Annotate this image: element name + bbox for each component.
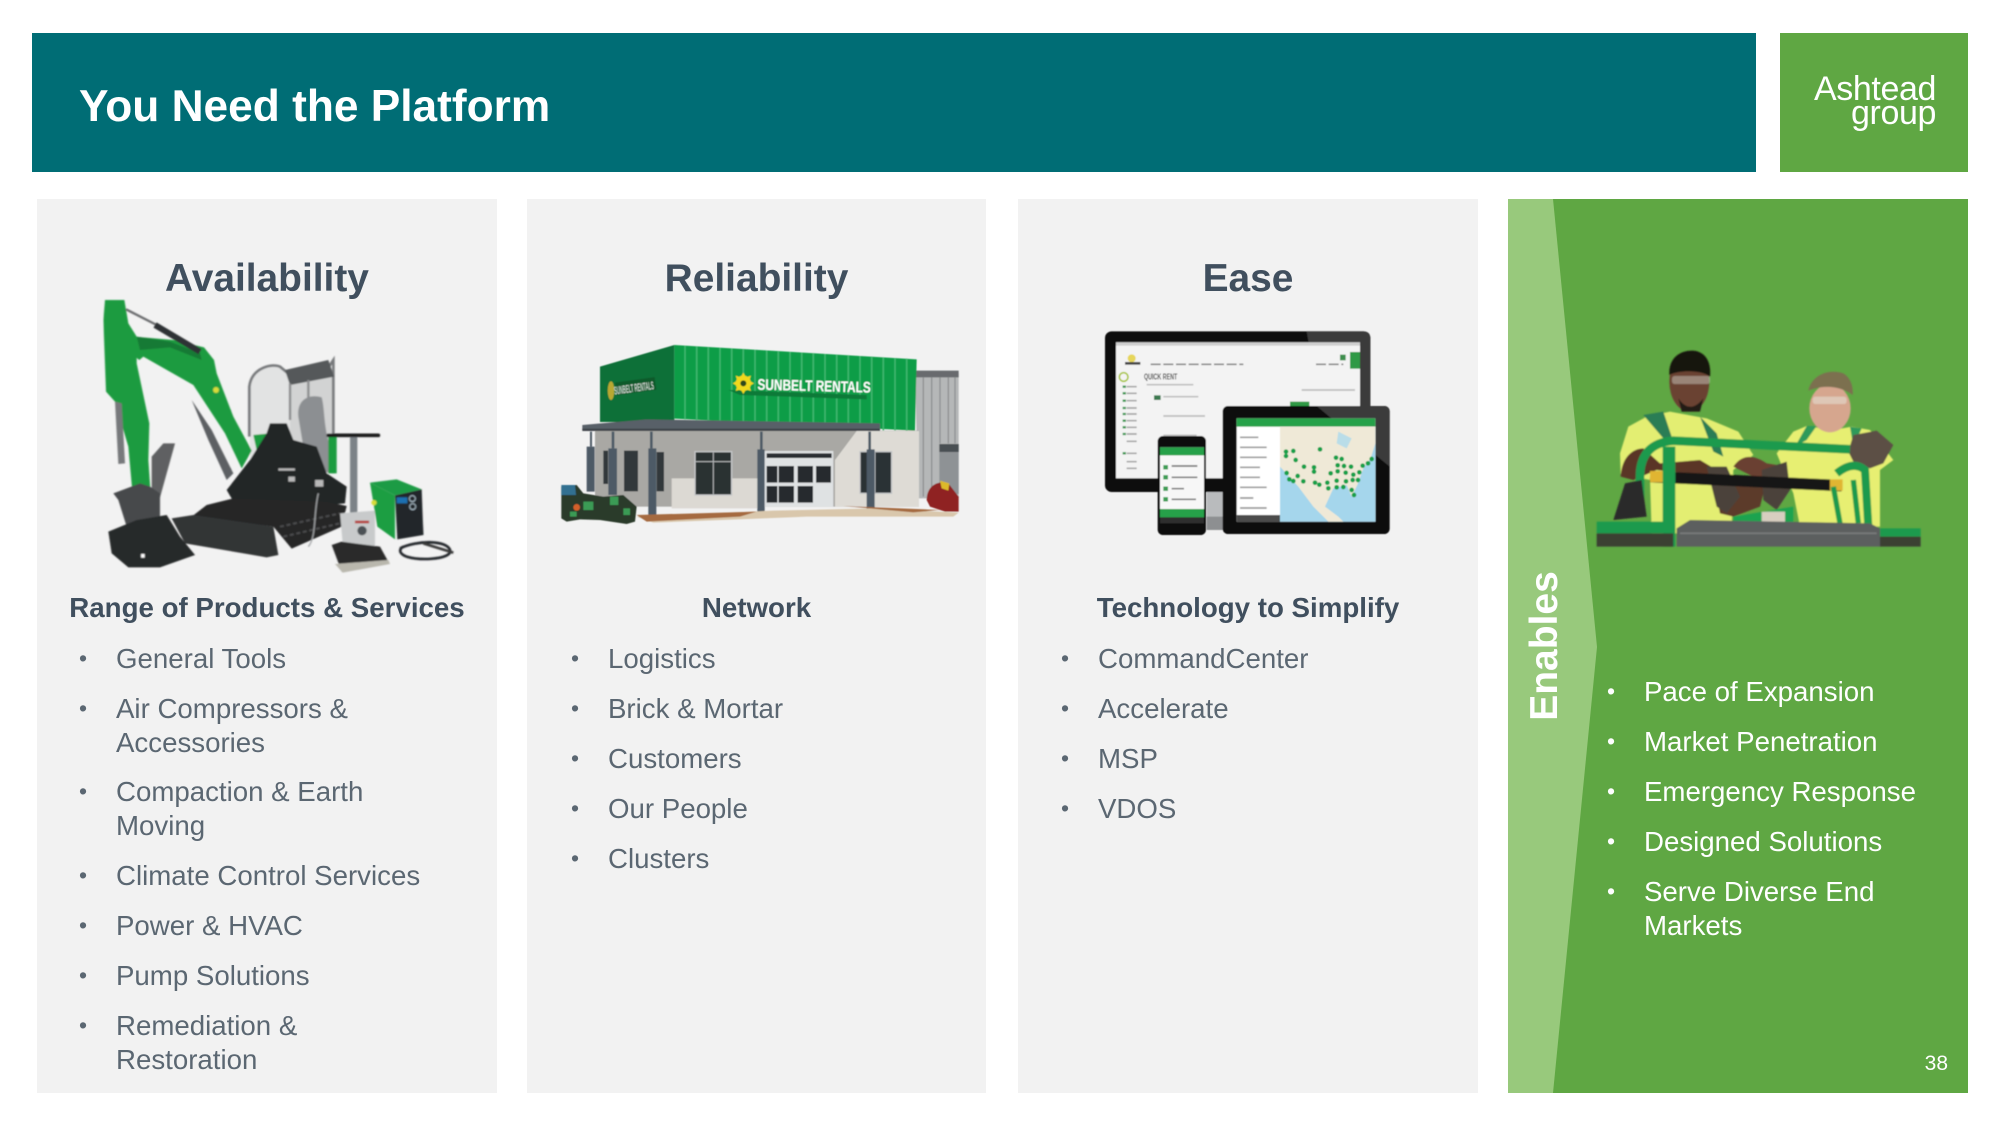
list item — [1061, 793, 1176, 824]
list item: Restoration — [116, 1044, 257, 1074]
list item: Compaction & Earth — [116, 776, 363, 807]
list item: • — [79, 1012, 87, 1038]
list item: Brick & Mortar — [608, 693, 783, 724]
header bar with title — [32, 33, 1756, 172]
list item — [1607, 876, 1874, 940]
list item — [79, 693, 348, 758]
list item: Accelerate — [1098, 693, 1229, 724]
list item: • — [1607, 728, 1615, 754]
page number: 38 — [1925, 1052, 1948, 1075]
list item: Pace of Expansion — [1644, 676, 1874, 707]
list item: Clusters — [608, 843, 709, 874]
logo wordmark — [1814, 70, 1936, 132]
list item: Customers — [608, 743, 742, 774]
heading: Availability: Availability — [165, 257, 369, 300]
list item: • — [571, 645, 579, 671]
list item: • — [1607, 778, 1615, 804]
list item: • — [1061, 745, 1069, 771]
list item: Market Penetration — [1644, 726, 1878, 757]
list item: Markets — [1644, 910, 1742, 940]
list item: Emergency Response — [1644, 776, 1916, 807]
illustration: monitor, tablet and phone screens — [1104, 330, 1391, 536]
list item: • — [79, 862, 87, 888]
illustration: excavator, compactor and welder — [102, 298, 454, 574]
logo wordmark: Ashtead — [1814, 70, 1936, 108]
list item: • — [1607, 828, 1615, 854]
list item: • — [1607, 678, 1615, 704]
list item: Power & HVAC — [116, 910, 303, 941]
illustration: Sunbelt Rentals branch building: SUNBELT RENTALS — [613, 380, 655, 398]
heading: Ease: Ease — [1203, 257, 1293, 300]
list item: Air Compressors & — [116, 693, 348, 724]
list item: • — [1061, 645, 1069, 671]
list item: • — [79, 962, 87, 988]
list item: MSP — [1098, 743, 1158, 774]
chevron band — [1508, 199, 1597, 1093]
bullet list: what the platform enables — [1607, 676, 1916, 940]
panel: Enables — [1508, 199, 1968, 1093]
list item: General Tools — [116, 643, 286, 674]
list item: • — [571, 795, 579, 821]
illustration: Sunbelt Rentals branch building: SUNBELT RENTALS — [757, 377, 871, 397]
list item: Logistics — [608, 643, 716, 674]
logo: Ashtead group — [1780, 33, 1968, 172]
panel: Availability — [37, 199, 497, 1093]
list item: • — [79, 645, 87, 671]
bullet list: products and services — [79, 346, 1808, 1074]
subheading: Range of Products & Services: Range of Products & Services — [69, 592, 465, 623]
list item: • — [79, 778, 87, 804]
list item: • — [571, 845, 579, 871]
list item: • — [79, 695, 87, 721]
subheading: Technology to Simplify: Technology to Simplify — [1097, 592, 1399, 623]
list item: Accessories — [116, 726, 265, 758]
panel: Reliability — [527, 199, 986, 1093]
list item: Moving — [116, 810, 205, 840]
list item: Climate Control Services — [116, 860, 420, 891]
list item: Pump Solutions — [116, 960, 310, 991]
illustration: monitor, tablet and phone screens: QUICK RENT — [1144, 371, 1178, 381]
bullet list: network — [571, 643, 783, 874]
title: You Need the Platform — [79, 82, 550, 131]
rotated label: Enables: Enables — [1523, 571, 1566, 721]
illustration: Sunbelt Rentals branch building — [560, 344, 960, 525]
panel: Ease — [1018, 199, 1478, 1093]
list item: • — [571, 695, 579, 721]
subheading: Network: Network — [702, 592, 811, 623]
list item: • — [571, 745, 579, 771]
heading: Reliability: Reliability — [665, 257, 848, 300]
list item: CommandCenter — [1098, 643, 1308, 674]
list item: • — [1607, 878, 1615, 904]
list item: VDOS — [1098, 793, 1176, 824]
list item — [79, 1010, 297, 1074]
list item — [1061, 743, 1158, 774]
photo illustration: two workers on a lift — [1596, 350, 1922, 548]
logo wordmark: group — [1851, 94, 1936, 132]
list item: • — [1061, 695, 1069, 721]
list item: Remediation & — [116, 1010, 297, 1041]
list item: • — [79, 912, 87, 938]
bullet list: technology — [1061, 643, 1308, 824]
list item: • — [1061, 795, 1069, 821]
list item: Serve Diverse End — [1644, 876, 1874, 907]
list item — [79, 776, 363, 841]
list item: Designed Solutions — [1644, 826, 1882, 857]
list item: Our People — [608, 793, 748, 824]
